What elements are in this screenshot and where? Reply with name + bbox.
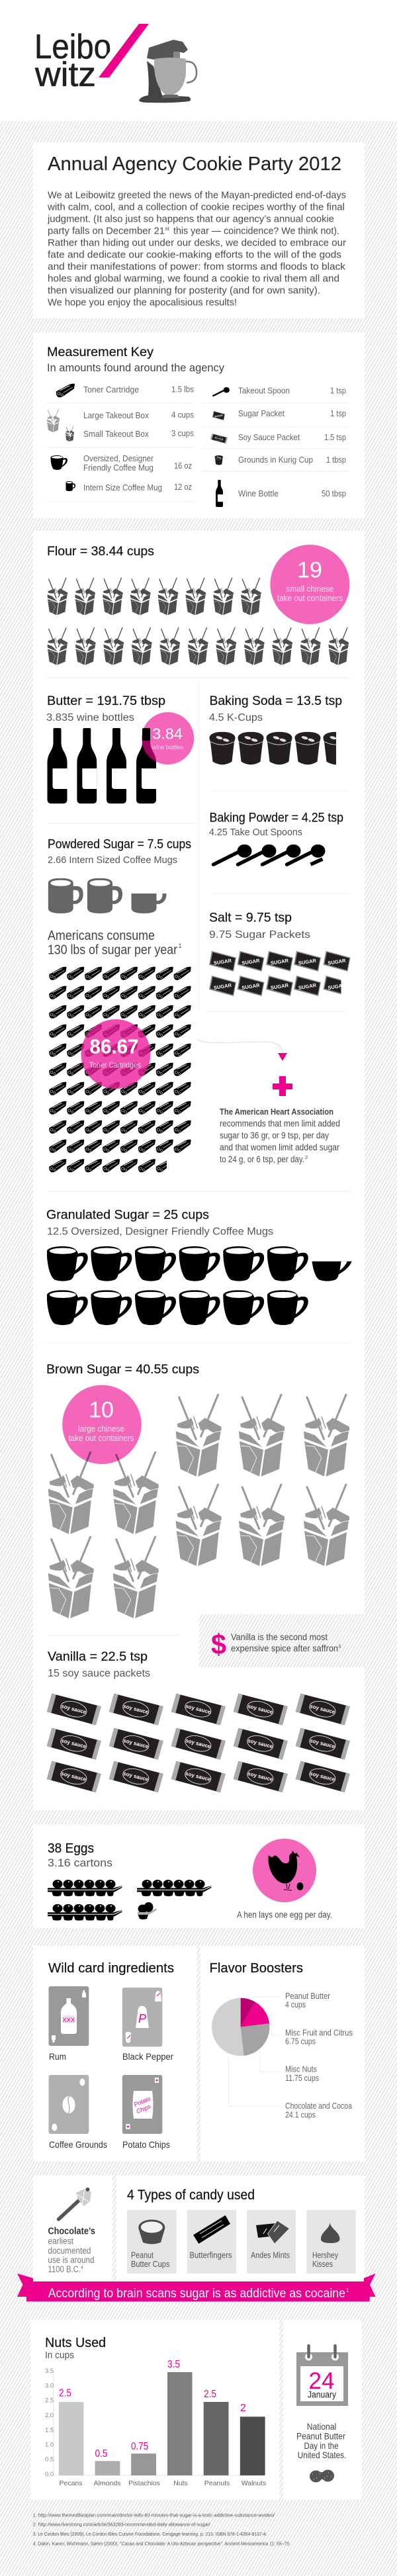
callout: 19 containers: small chinese <box>286 584 333 594</box>
key row: grounds in k-cup: 1 tbsp <box>326 455 346 465</box>
tile: andes mints: Andes Mints <box>251 2251 290 2260</box>
tile: peanut butter cups: Butter Cups <box>131 2260 169 2269</box>
callout text: 10 large containers: large chinese <box>78 1424 124 1434</box>
chart: nuts bar chart <box>45 2359 266 2487</box>
text: american heart association <box>220 1107 340 1164</box>
callout text: 10 large containers: 10 <box>89 1398 114 1423</box>
text: american heart association: sugar to 36 gr, or 9 tsp, per day <box>220 1130 329 1140</box>
panel: intro <box>33 142 365 318</box>
panel: peanut butter day <box>283 2320 362 2500</box>
callout: vanilla expensive spice: expensive spice after saffron <box>231 1643 338 1653</box>
tile: hershey kisses: Kisses <box>312 2260 333 2269</box>
y axis labels: 2.0 <box>45 2412 54 2419</box>
footnotes <box>33 2512 290 2547</box>
y axis labels: 1.0 <box>45 2442 54 2449</box>
icon: calendar <box>296 2346 348 2406</box>
logo: Leibo <box>34 28 111 66</box>
icon: stand mixer <box>139 40 197 103</box>
bar: pistachios: Pistachios <box>128 2479 160 2487</box>
key row: wine bottle <box>216 480 346 507</box>
text: american heart association: 2 <box>305 1154 308 1160</box>
banner: sugar addictive: According to brain scans sugar is as addictive as cocaine <box>48 2286 345 2301</box>
callout circle: 3.84 <box>142 712 194 764</box>
intro text: party falls on December 21 <box>48 226 165 236</box>
footnotes: 3. Le Cordon Bleu (2009). Le Cordon Bleu Cuisine Foundations. Cengage learning. p. 213. ISBN 978-1-4354-8137-4. <box>33 2531 267 2537</box>
callout: vanilla expensive spice: $ <box>211 1629 226 1661</box>
text: chocolate earliest use: Chocolate’s <box>48 2227 95 2237</box>
panel: wild card ingredients <box>33 1946 197 2162</box>
text: american heart association: and that women limit added sugar <box>220 1142 339 1152</box>
subheading: sugar packets: 9.75 Sugar Packets <box>209 929 310 941</box>
heading: nuts used: Nuts Used <box>45 2336 106 2350</box>
intro text: We at Leibowitz greeted the news of the Mayan-predicted end-of-days <box>48 190 346 201</box>
callout: 86.67 toner cartridges: 86.67 <box>90 1035 139 1058</box>
panel: measurement key <box>33 332 365 518</box>
text: american heart association: to 24 g, or 6 tsp, per day. <box>220 1154 304 1164</box>
footnotes: 1. http://www.themedifastplan.com/main/doctor-tells-60-minutes-that-sugar-is-a-toxic-addictive-substance-wvideo/ <box>33 2512 275 2518</box>
icon: chocolate stirrer <box>58 2187 91 2219</box>
card: black pepper: Black Pepper <box>122 2051 173 2062</box>
baking soda section <box>209 694 349 764</box>
intro text: and their manifestations of power: from storms and floods to black <box>48 261 346 272</box>
heading: butter: Butter = 191.75 tbsp <box>47 694 165 708</box>
brown sugar section <box>46 1362 350 1618</box>
icons: intern mugs <box>48 878 167 913</box>
heading: flour: Flour = 38.44 cups <box>47 544 154 559</box>
tile: andes mints <box>247 2210 296 2274</box>
key row: wine bottle: 50 tbsp <box>322 488 346 498</box>
bar: almonds: Almonds <box>94 2479 120 2487</box>
icons: takeout boxes row 1 <box>48 578 261 615</box>
pie label: chocolate and cocoa <box>285 2101 352 2120</box>
key row: toner cartridge: 1.5 lbs <box>171 385 194 394</box>
intro text: with calm, cool, and a collection of cookie recipes worthy of the final <box>47 202 345 212</box>
y axis labels: 2.5 <box>45 2397 54 2405</box>
bar: walnuts: Walnuts <box>242 2479 266 2487</box>
key row: takeout spoon <box>213 386 346 396</box>
pie label: peanut butter: Peanut Butter <box>285 1992 330 2001</box>
heading: vanilla: Vanilla = 22.5 tsp <box>48 1649 148 1664</box>
callout: 19 containers: 19 <box>297 558 322 583</box>
text: national peanut butter day: Peanut Butter <box>296 2431 345 2442</box>
text: american heart association: recommends that men limit added <box>220 1119 340 1128</box>
text: chocolate earliest use <box>48 2227 95 2274</box>
text: americans consume: Americans consume <box>48 929 155 943</box>
bar: nuts <box>167 2359 192 2487</box>
icons: soy sauce packets <box>47 1694 350 1792</box>
callout: 86.67 toner cartridges <box>81 1019 151 1089</box>
footnotes: 4. Dakin, Karen; Wichmann, Søren (2000). "Cacao and Chocolate: A Uto-Aztecan perspective". Ancient Mesoamerica 11: 55–75. <box>33 2541 290 2547</box>
heading: salt: Salt = 9.75 tsp <box>209 911 292 925</box>
key row: soy sauce packet: Soy Sauce Packet <box>238 432 300 442</box>
bar: peanuts: 2.5 <box>204 2389 216 2400</box>
pie label: nuts: 11.75 cups <box>285 2074 319 2083</box>
baking powder section <box>209 811 343 864</box>
title: Annual Agency Cookie Party 2012 <box>48 154 341 175</box>
text: national peanut butter day: United States. <box>298 2450 346 2460</box>
intro text: then visualized our planning for posterity (and for own sanity). <box>48 285 320 296</box>
card: black pepper: P <box>138 2012 146 2025</box>
bar: pistachios <box>128 2441 160 2487</box>
subheading: in cups: In cups <box>45 2350 74 2361</box>
y axis labels: 3.0 <box>45 2382 54 2389</box>
icon: calendar: 24 <box>309 2368 334 2394</box>
icon: hen and egg <box>269 1851 303 1890</box>
text: americans consume <box>48 929 182 958</box>
intro text: judgment. (It also just so happens that our agency’s annual cookie <box>47 214 334 224</box>
key row: intern coffee mug <box>66 481 192 492</box>
card: coffee grounds: Coffee Grounds <box>49 2139 107 2150</box>
key row: sugar packet: Sugar Packet <box>238 408 285 418</box>
text: hen lays one egg: A hen lays one egg per day. <box>237 1910 332 1920</box>
callout: 86.67 toner cartridges: Toner Cartridges <box>89 1060 141 1070</box>
heading: powdered sugar: Powdered Sugar = 7.5 cups <box>48 837 191 852</box>
text: national peanut butter day: National <box>307 2421 336 2432</box>
key row: oversized coffee mug <box>50 453 192 473</box>
card: coffee grounds <box>49 2075 107 2150</box>
panel: candy types <box>116 2176 365 2281</box>
callout text: 3.84 wine bottles: wine bottles <box>152 744 184 751</box>
panel: flavor boosters <box>200 1946 365 2162</box>
tile: hershey kisses <box>306 2210 356 2274</box>
card: potato chips: Potato <box>133 2095 152 2108</box>
bar: walnuts <box>240 2403 266 2487</box>
panel: eggs <box>33 1825 365 1928</box>
text: chocolate earliest use: 1100 B.C. <box>48 2264 81 2274</box>
key row: small takeout box <box>66 426 194 441</box>
key row: toner cartridge <box>56 384 194 397</box>
card: potato chips: Chips <box>135 2103 152 2115</box>
bar: peanuts <box>204 2389 230 2487</box>
text: chocolate earliest use: earliest <box>48 2236 73 2246</box>
key row: large takeout box: 4 cups <box>171 410 194 420</box>
tile: butterfingers <box>187 2210 236 2274</box>
key row: small takeout box: 3 cups <box>171 428 194 438</box>
key row: large takeout box: Large Takeout Box <box>83 410 149 420</box>
card: rum: XXX <box>62 2017 75 2024</box>
tile: peanut butter cups: Peanut <box>131 2251 154 2260</box>
panel: nuts used <box>30 2320 279 2500</box>
y axis labels: 0.5 <box>45 2456 54 2463</box>
logo <box>34 24 149 94</box>
tile: peanut butter cups <box>127 2210 177 2274</box>
intro text: We hope you enjoy the apocalisious results! <box>48 297 237 308</box>
y axis labels <box>45 2368 54 2478</box>
icon: calendar: January <box>308 2390 336 2400</box>
subheading: In amounts found around the agency <box>47 361 224 374</box>
card: black pepper <box>122 1988 173 2062</box>
heading: wild card ingredients: Wild card ingredients <box>48 1960 174 1976</box>
panel: main ingredients <box>33 531 365 1810</box>
subheading: soy sauce packets: 15 soy sauce packets <box>48 1668 150 1679</box>
intro text: holes and global warming, we found a cookie to rival them all and <box>48 273 339 284</box>
key row: small takeout box: Small Takeout Box <box>83 429 149 439</box>
card: potato chips: Potato Chips <box>122 2139 170 2150</box>
heading: flavor boosters: Flavor Boosters <box>209 1960 303 1976</box>
icons: oversized mugs <box>47 1246 353 1325</box>
callout: vanilla expensive spice: 3 <box>338 1643 341 1649</box>
subheading: k-cups: 4.5 K-Cups <box>209 712 263 723</box>
key row: intern coffee mug: Intern Size Coffee Mug <box>83 483 162 492</box>
callout: vanilla expensive spice <box>211 1629 341 1661</box>
y axis labels: 1.5 <box>45 2426 54 2434</box>
key row: oversized coffee mug: 16 oz <box>174 461 192 471</box>
heading: eggs: 38 Eggs <box>48 1841 94 1856</box>
pie label: peanut butter: 4 cups <box>285 2000 306 2009</box>
heading: brown sugar: Brown Sugar = 40.55 cups <box>46 1362 199 1377</box>
subheading: spoons: 4.25 Take Out Spoons <box>209 827 302 838</box>
subheading: wine bottles: 3.835 wine bottles <box>46 712 134 723</box>
key row: intern coffee mug: 12 oz <box>174 482 192 492</box>
bar: nuts: 3.5 <box>167 2359 180 2370</box>
pie label: peanut butter <box>285 1992 330 2009</box>
callout text: 10 large containers <box>69 1398 134 1443</box>
flour section <box>47 544 349 665</box>
bar: pecans <box>59 2388 83 2487</box>
americans consume sugar <box>48 929 191 1172</box>
heading: granulated sugar: Granulated Sugar = 25 cups <box>46 1208 209 1222</box>
key row: wine bottle: Wine Bottle <box>238 488 279 498</box>
subheading: oversized mugs: 12.5 Oversized, Designer Friendly Coffee Mugs <box>47 1226 273 1238</box>
heading: candy: 4 Types of candy used <box>127 2187 255 2203</box>
logo: witz <box>34 56 96 94</box>
granulated sugar section <box>46 1208 353 1325</box>
card: rum: Rum <box>49 2051 66 2062</box>
subheading: cartons: 3.16 cartons <box>48 1857 112 1869</box>
arrow: to heart association <box>198 1040 287 1061</box>
y axis labels: 3.5 <box>45 2368 54 2375</box>
key row: oversized coffee mug: Oversized, Designer <box>83 453 154 463</box>
intro text: fate and dedicate our cookie-making efforts to the will of the gods <box>48 250 341 260</box>
text: national peanut butter day: Day in the <box>304 2440 339 2451</box>
icons: k-cups <box>209 732 349 764</box>
pie label: fruit and citrus: 6.75 cups <box>285 2037 316 2047</box>
bar: almonds: 0.5 <box>95 2448 108 2460</box>
tile: butterfingers: Butterfingers <box>189 2251 232 2260</box>
intro text: Rather than hiding out under our desks, we decided to embrace our <box>48 238 346 248</box>
key row: toner cartridge: Toner Cartridge <box>83 385 139 394</box>
pie label: nuts: Misc Nuts <box>285 2065 317 2074</box>
chart: pie <box>212 1998 269 2056</box>
key row: soy sauce packet <box>210 432 346 443</box>
callout: vanilla expensive spice: Vanilla is the second most <box>231 1632 328 1642</box>
intro text: st <box>165 226 169 232</box>
bar: walnuts: 2 <box>240 2403 246 2414</box>
text: americans consume: 1 <box>179 943 182 949</box>
text: chocolate earliest use: 4 <box>81 2266 83 2270</box>
icons: spoons <box>213 845 326 864</box>
text: chocolate earliest use: use is around <box>48 2255 94 2265</box>
callout: 19 containers: take out containers <box>277 594 343 603</box>
callout: 19 containers <box>270 545 349 624</box>
text: american heart association: The American Heart Association <box>220 1107 333 1117</box>
y axis labels: 0.0 <box>45 2471 54 2478</box>
icon: peanut <box>310 2470 334 2482</box>
callout circle: 10 containers <box>62 1385 142 1464</box>
key row: soy sauce packet: 1.5 tsp <box>324 432 346 442</box>
pie label: fruit and citrus <box>285 2029 353 2047</box>
key row: sugar packet: 1 tsp <box>330 408 346 418</box>
bar: pecans: 2.5 <box>59 2388 71 2399</box>
pie label: nuts <box>285 2065 319 2083</box>
intro text: this year — coincidence? We think not). <box>173 226 339 236</box>
tile: hershey kisses: Hershey <box>312 2251 339 2260</box>
panel: chocolate history <box>33 2176 112 2281</box>
key row: large takeout box <box>47 409 194 432</box>
icons: large takeout boxes <box>48 1395 350 1618</box>
icons: toner cartridges grid <box>49 967 191 1172</box>
bottle and circle overlap <box>142 741 156 762</box>
icons: egg cartons <box>48 1880 212 1921</box>
salt section <box>209 911 351 996</box>
powdered sugar section <box>48 837 191 913</box>
callout: hen <box>237 1839 332 1920</box>
vanilla section <box>47 1649 350 1792</box>
callout text: 3.84 wine bottles <box>152 725 184 751</box>
text: national peanut butter day <box>296 2421 346 2460</box>
pie label: fruit and citrus: Misc Fruit and Citrus <box>285 2029 353 2038</box>
banner: sugar addictive <box>17 2274 376 2301</box>
footnotes: 2. http://www.livestrong.com/article/363283-recommended-daily-allowance-of-sugar/ <box>33 2522 211 2528</box>
bar: peanuts: Peanuts <box>204 2479 230 2487</box>
bar: pecans: Pecans <box>59 2479 83 2487</box>
key row: grounds in k-cup: Grounds in Kurig Cup <box>238 455 313 465</box>
key row: sugar packet <box>212 408 346 420</box>
text: chocolate earliest use: documented <box>48 2246 91 2256</box>
card: potato chips <box>122 2075 170 2150</box>
butter section <box>46 694 194 804</box>
bar: pistachios: 0.75 <box>131 2441 148 2452</box>
banner: sugar addictive: 1 <box>346 2287 349 2293</box>
key row: grounds in k-cup <box>214 455 346 465</box>
key row: oversized coffee mug: Friendly Coffee Mug <box>83 463 154 473</box>
intro text <box>47 190 346 308</box>
text: americans consume: 130 lbs of sugar per year <box>48 943 177 958</box>
pie label: chocolate and cocoa: Chocolate and Cocoa <box>285 2101 352 2111</box>
heading: baking powder: Baking Powder = 4.25 tsp <box>209 811 343 825</box>
card: rum <box>49 1986 89 2062</box>
icons: takeout boxes row 2 <box>48 627 349 665</box>
icon: medical plus <box>273 1076 292 1096</box>
heading: baking soda: Baking Soda = 13.5 tsp <box>209 694 342 708</box>
pie label: chocolate and cocoa: 24.1 cups <box>285 2111 316 2120</box>
icons: wine bottles <box>48 728 156 804</box>
heading: measurement key: Measurement Key <box>47 345 154 359</box>
subheading: coffee mugs: 2.66 Intern Sized Coffee Mugs <box>48 854 177 866</box>
key row: takeout spoon: Takeout Spoon <box>238 386 290 396</box>
key row: takeout spoon: 1 tsp <box>330 386 346 396</box>
bar: nuts: Nuts <box>173 2479 188 2487</box>
icons: sugar packets <box>209 951 351 996</box>
callout text: 10 large containers: take out containers <box>69 1434 134 1443</box>
bar: almonds <box>94 2448 120 2487</box>
callout text: 3.84 wine bottles: 3.84 <box>152 725 183 743</box>
